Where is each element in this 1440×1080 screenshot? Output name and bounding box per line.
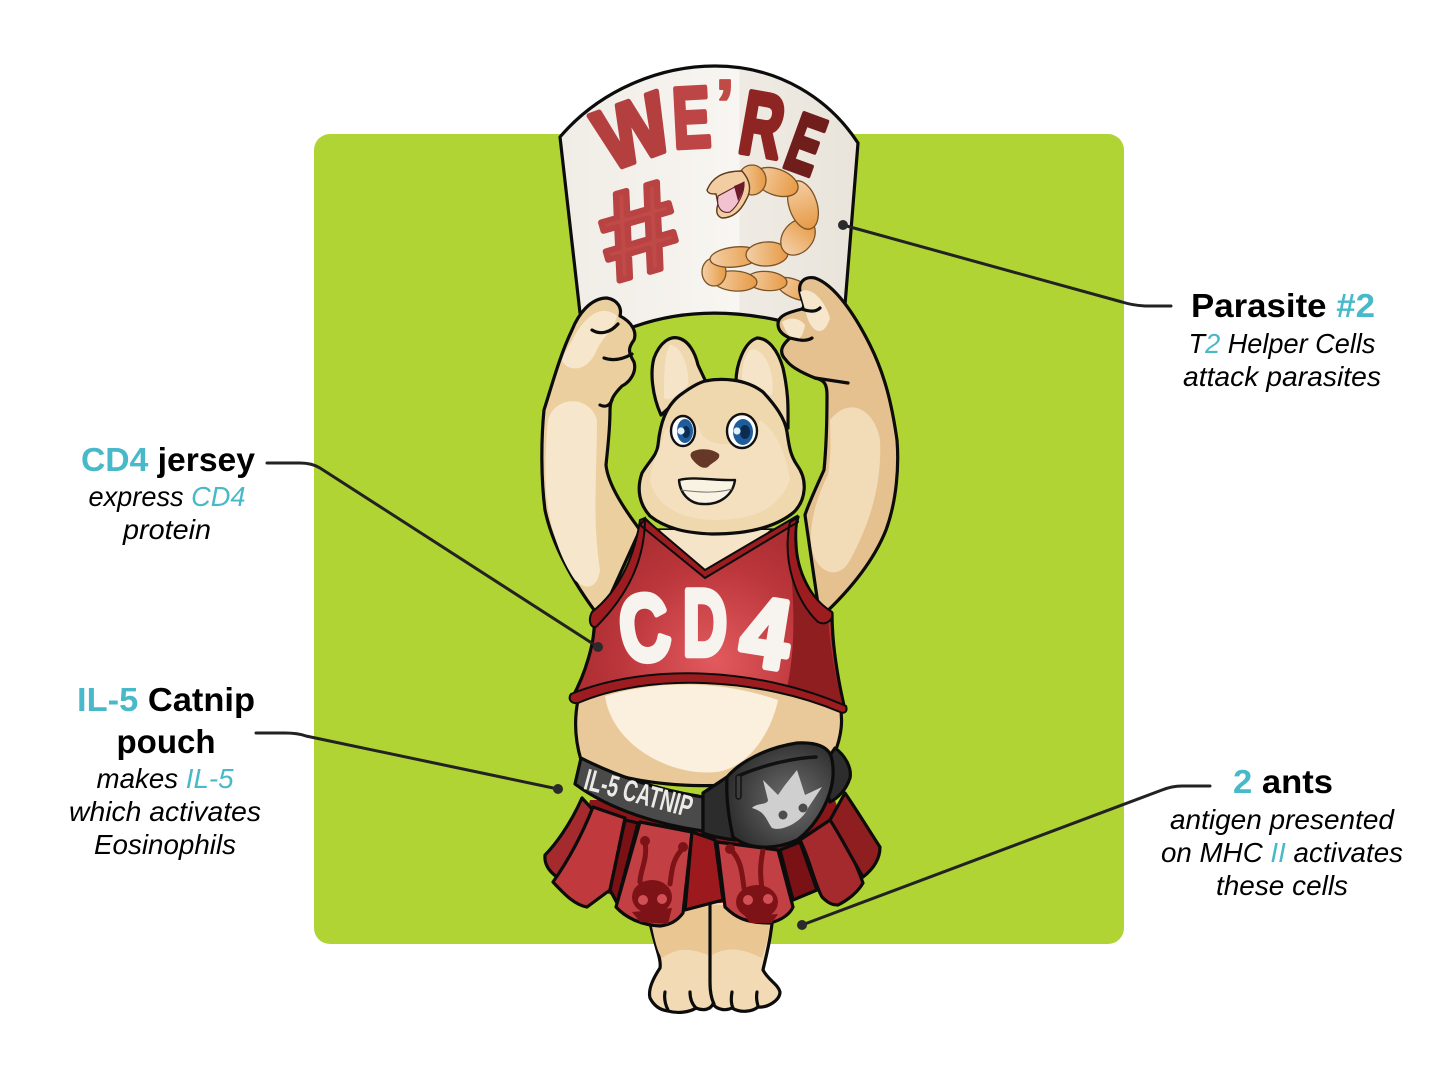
description: T2 Helper Cells xyxy=(1188,328,1376,359)
leader line and dot to sign xyxy=(838,220,1171,306)
description: attack parasites xyxy=(1183,361,1381,392)
sign lettering WE'RE: R xyxy=(733,72,792,177)
description: which activates xyxy=(69,796,261,827)
jersey lettering CD4 xyxy=(613,570,798,691)
right arm and hand xyxy=(778,278,898,618)
smile xyxy=(679,478,735,504)
sign lettering WE'RE: E xyxy=(670,69,713,167)
description: protein xyxy=(122,514,211,545)
green background panel xyxy=(314,134,1124,944)
description: on MHC II activates xyxy=(1161,837,1403,868)
callout: 2 ants xyxy=(797,763,1403,930)
legs and feet xyxy=(645,890,780,1012)
description xyxy=(1161,804,1403,901)
jersey lettering CD4: 4 xyxy=(734,577,798,691)
heading: IL-5 Catnip xyxy=(77,681,255,718)
sign: WE'RE #2 xyxy=(560,65,858,327)
description xyxy=(69,763,261,860)
jersey lettering CD4: C xyxy=(613,574,676,684)
eyes xyxy=(671,414,757,448)
sign lettering hash: # xyxy=(582,154,695,309)
heading: pouch xyxy=(116,723,216,760)
leader line and dot to jersey xyxy=(267,463,603,652)
heading: CD4 jersey xyxy=(81,441,256,478)
callout: CD4 jersey xyxy=(81,441,603,652)
description: Eosinophils xyxy=(94,829,236,860)
callout: IL-5 Catnip pouch xyxy=(69,681,563,860)
left arm and hand xyxy=(542,298,640,618)
worm forming number two xyxy=(702,162,824,305)
description: express CD4 xyxy=(88,481,245,512)
torso belly and neck xyxy=(576,530,842,786)
description xyxy=(1183,328,1381,392)
sign lettering WE'RE: E xyxy=(775,96,836,194)
head xyxy=(639,379,804,534)
heading xyxy=(77,681,255,760)
description: makes IL-5 xyxy=(96,763,234,794)
heading: Parasite #2 xyxy=(1191,287,1375,324)
description: these cells xyxy=(1216,870,1348,901)
leader line and dot to belt xyxy=(256,733,563,794)
description xyxy=(88,481,245,545)
nose xyxy=(690,449,719,468)
sign lettering WE'RE xyxy=(583,65,836,194)
leader line and dot to skirt xyxy=(797,786,1210,930)
belt with IL-5 CATNIP: IL-5 CATNIP xyxy=(581,763,696,824)
jersey lettering CD4: D xyxy=(683,570,727,675)
jersey xyxy=(570,516,847,713)
description: antigen presented xyxy=(1170,804,1395,835)
ant emblem left xyxy=(632,836,688,924)
skirt xyxy=(545,793,880,926)
ears xyxy=(652,338,788,428)
cheerleader T helper character xyxy=(542,278,898,1012)
callout: Parasite #2 xyxy=(838,220,1381,392)
heading: 2 ants xyxy=(1233,763,1333,800)
sign lettering WE'RE: ’ xyxy=(715,65,735,143)
sign lettering WE'RE: W xyxy=(583,74,684,189)
fanny pack xyxy=(703,743,850,847)
ant emblem right xyxy=(725,844,778,923)
